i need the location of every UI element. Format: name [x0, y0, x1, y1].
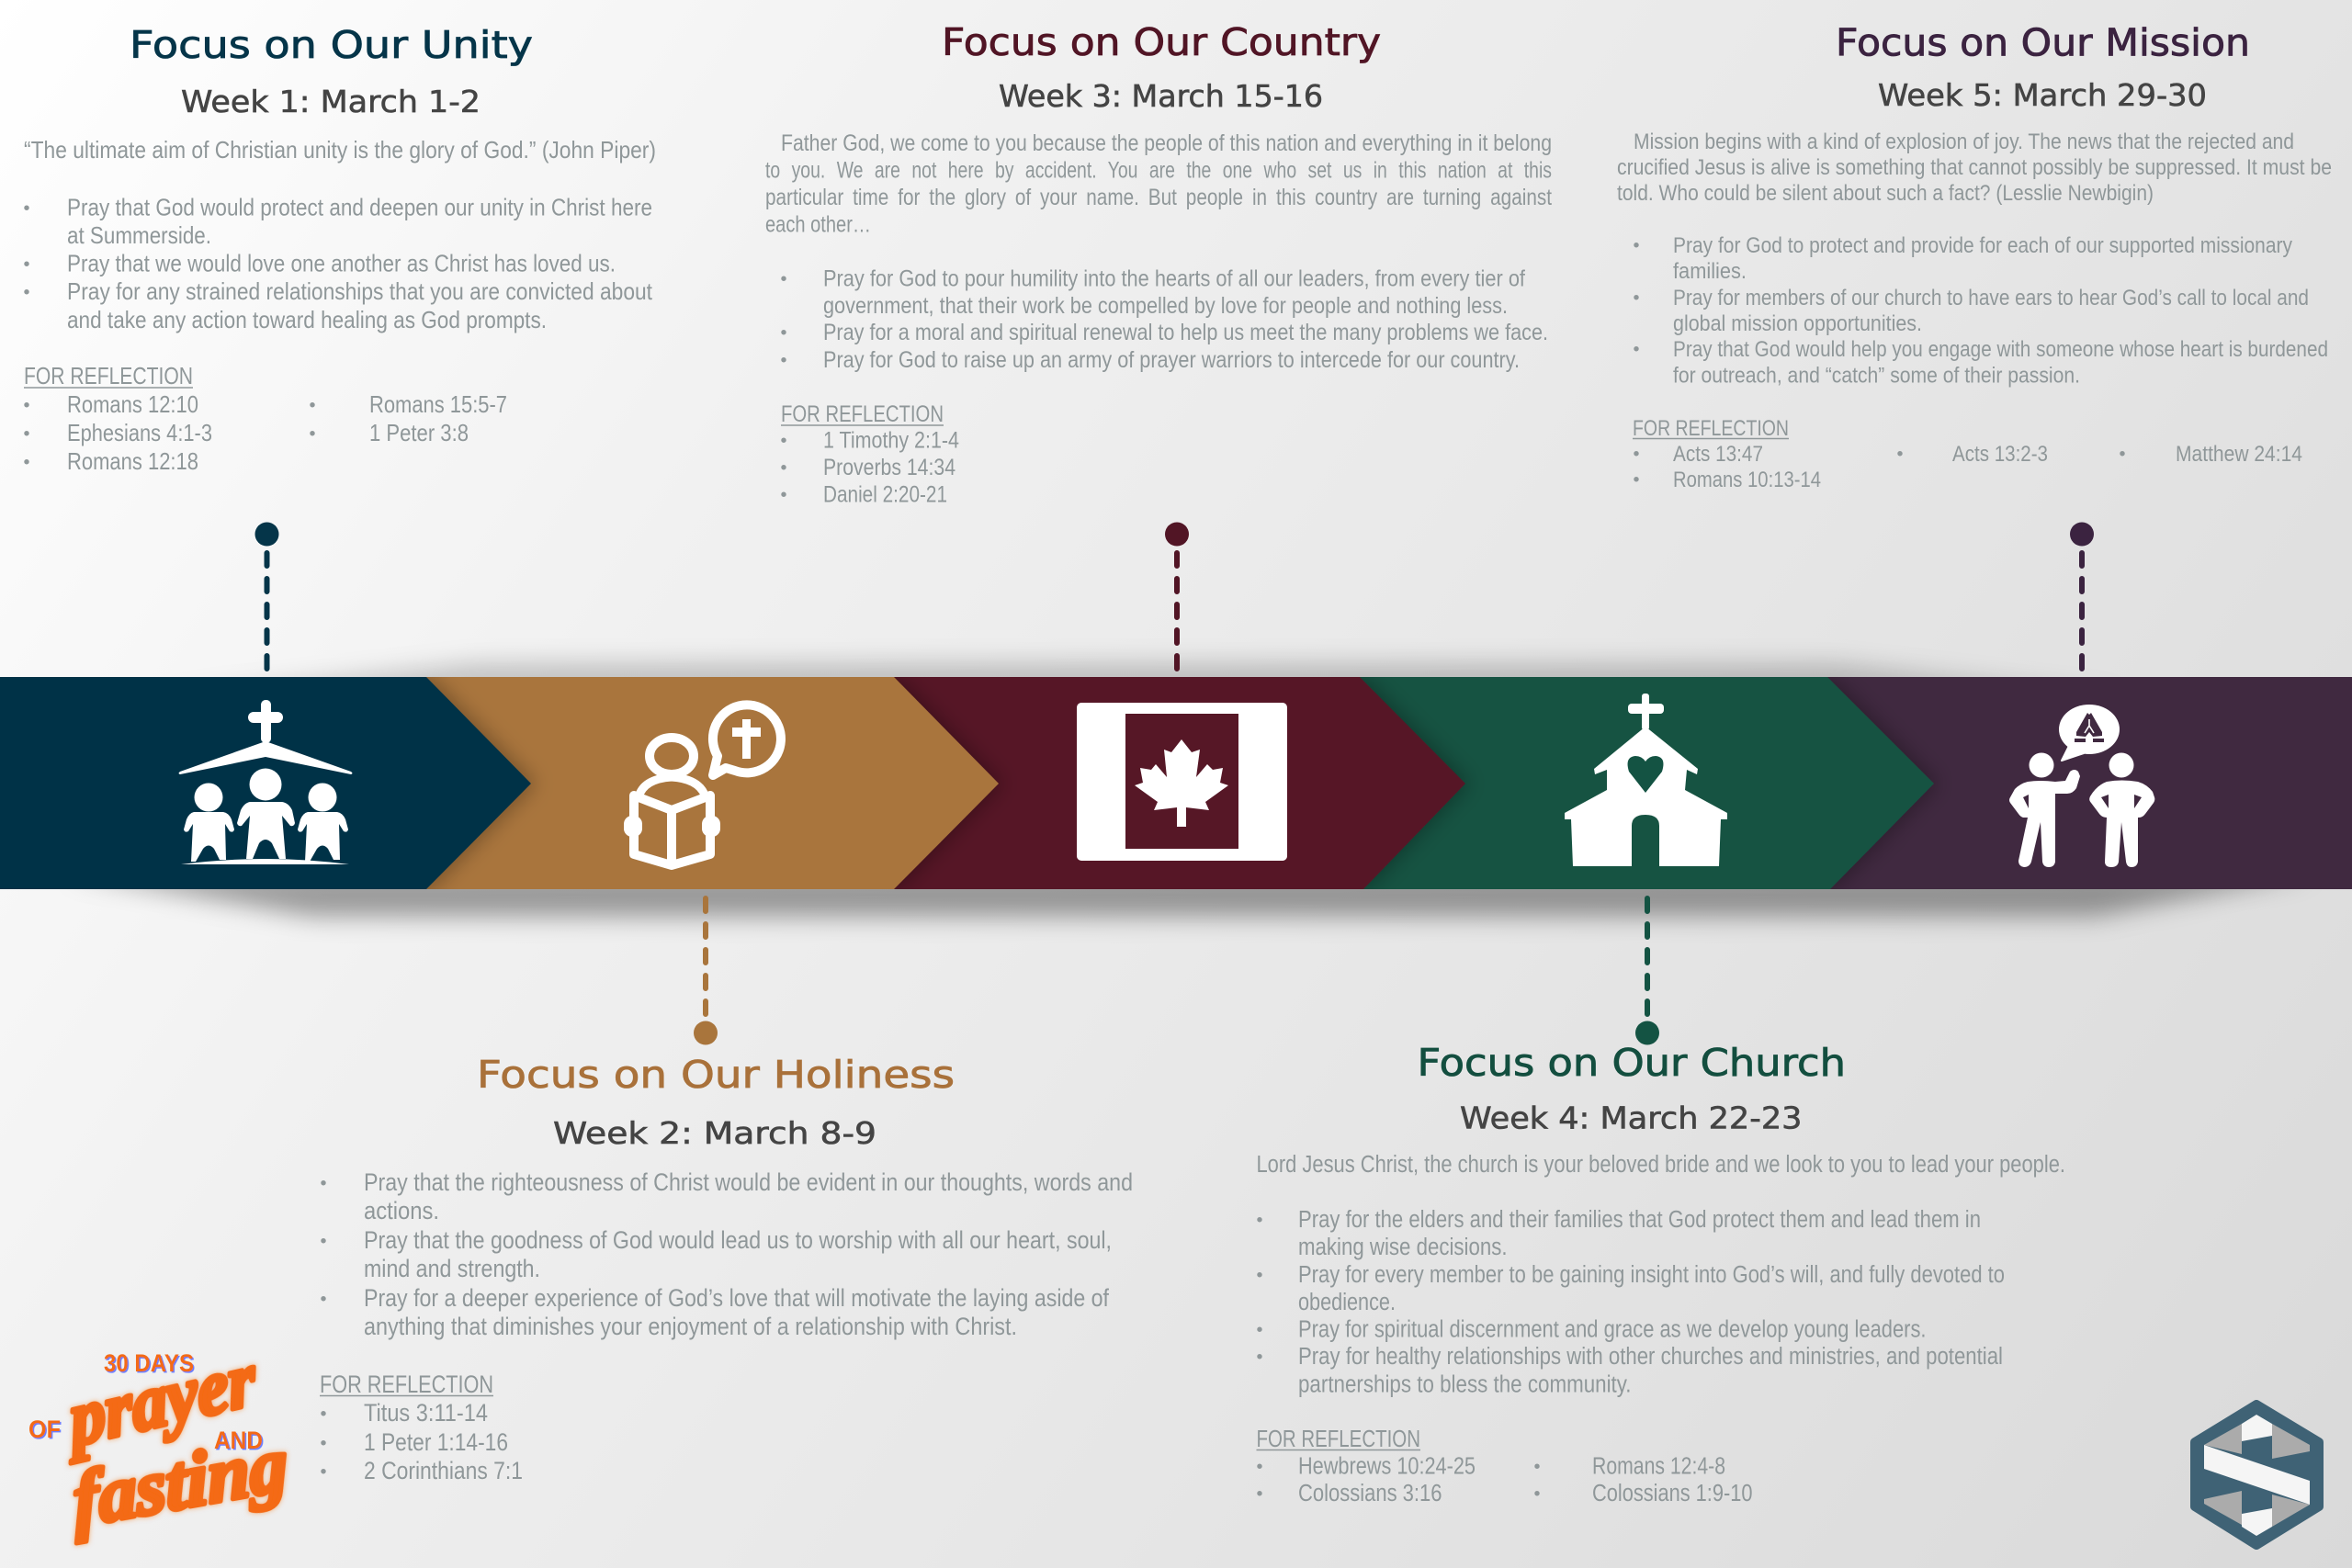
logo: 30 days of prayer and fasting	[28, 1336, 290, 1544]
text block: unity prayers: •	[23, 254, 30, 275]
reflection list: holiness: •	[320, 1404, 327, 1424]
text block: country prayer: Pray for a moral and spiritual renewal to help us meet the many problems we face.	[823, 320, 1548, 345]
panel: week 2 holiness	[320, 1053, 1133, 1484]
reflection list: unity: •	[309, 424, 316, 445]
connector: country pin	[1165, 522, 1189, 669]
title: church: Focus on Our Church	[1417, 1041, 1846, 1085]
text block: mission prayers	[1617, 130, 2332, 388]
reflection list: country: Daniel 2:20-21	[823, 481, 947, 507]
title: holiness: Focus on Our Holiness	[477, 1053, 955, 1097]
chevron: mission	[1819, 677, 2352, 889]
subheading: week 3: Week 3: March 15-16	[999, 78, 1323, 114]
text block: mission prayers: for outreach, and “catch” some of their passion.	[1673, 364, 2080, 388]
text block: country prayer: each other…	[765, 211, 871, 237]
connector: mission pin	[2070, 522, 2094, 669]
text block: country prayer: •	[780, 269, 787, 289]
chevron: holiness	[426, 677, 999, 889]
reflection list: unity: Ephesians 4:1-3	[67, 419, 212, 446]
text block: mission prayers: families.	[1673, 259, 1747, 284]
text block: country prayer: government, that their work be compelled by love for people and nothing less.	[823, 293, 1508, 319]
reflection list: mission: Matthew 24:14	[2176, 442, 2302, 467]
reflection list: church: Romans 12:4-8	[1592, 1453, 1725, 1479]
subheading: week 4: Week 4: March 22-23	[1460, 1100, 1803, 1135]
connector: holiness pin	[694, 898, 718, 1045]
reflection list: unity: Romans 15:5-7	[369, 390, 507, 418]
title: unity: Focus on Our Unity	[130, 23, 533, 67]
panel: week 1 unity	[23, 23, 656, 475]
text block: holiness prayers: •	[320, 1290, 327, 1310]
reflection list: holiness: •	[320, 1462, 327, 1483]
text block: church prayers: Pray for every member to be gaining insight into God’s will, and fully devoted to	[1298, 1262, 2005, 1288]
reflection list: country: 1 Timothy 2:1-4	[823, 428, 959, 454]
text block: holiness prayers: Pray that the goodness of God would lead us to worship with all our heart, soul,	[364, 1226, 1112, 1254]
reflection list: unity: •	[309, 395, 316, 415]
reflection list: mission	[1633, 416, 2302, 492]
subheading: week 1: Week 1: March 1-2	[181, 84, 481, 119]
text block: church prayers: partnerships to bless the community.	[1298, 1372, 1632, 1398]
chevron: country	[894, 677, 1465, 889]
text block: unity prayers: •	[23, 198, 30, 219]
text block: church prayers	[1256, 1152, 2065, 1398]
logo: summerside hexagon	[2195, 1404, 2319, 1545]
icon: two people with prayer bubble	[2009, 705, 2154, 867]
text block: country prayer: •	[780, 323, 787, 344]
icon: church roof with family	[178, 700, 353, 864]
subheading: week 2: Week 2: March 8-9	[553, 1115, 876, 1151]
text block: mission prayers: •	[1633, 288, 1640, 309]
text block: church prayers: Pray for spiritual discernment and grace as we develop young leaders.	[1298, 1317, 1926, 1343]
logo: 30 days of prayer and fasting: fasting	[71, 1421, 290, 1544]
chevron: unity	[0, 677, 531, 889]
icon: reader with bible and speech bubble	[624, 705, 781, 865]
reflection list: holiness: 1 Peter 1:14-16	[364, 1428, 508, 1456]
reflection list: church: •	[1533, 1484, 1541, 1505]
logo: 30 days of prayer and fasting: prayer	[61, 1336, 261, 1464]
reflection list: church: •	[1533, 1457, 1541, 1477]
text block: holiness prayers: Pray that the righteousness of Christ would be evident in our thoughts, words and	[364, 1168, 1133, 1196]
reflection list: holiness	[320, 1371, 523, 1484]
reflection list: unity: •	[23, 424, 30, 445]
panel: week 3 country	[765, 20, 1552, 507]
text block: holiness prayers: •	[320, 1231, 327, 1251]
text block: country prayer: Pray for God to raise up an army of prayer warriors to intercede for our country.	[823, 347, 1520, 373]
text block: country prayer	[765, 130, 1552, 373]
text block: holiness prayers: mind and strength.	[364, 1255, 540, 1282]
text block: church prayers: Pray for the elders and their families that God protect them and lead them in	[1298, 1207, 1981, 1233]
reflection list: mission: •	[1633, 470, 1640, 491]
reflection list: church	[1256, 1427, 1753, 1506]
title: mission: Focus on Our Mission	[1836, 20, 2250, 64]
reflection list: mission: •	[1633, 445, 1640, 465]
reflection list: holiness: 2 Corinthians 7:1	[364, 1457, 523, 1484]
text block: church prayers: •	[1256, 1320, 1263, 1340]
reflection list: country: •	[780, 431, 787, 451]
text block: unity prayers: •	[23, 283, 30, 303]
text block: holiness prayers: •	[320, 1174, 327, 1194]
reflection list: unity	[23, 362, 507, 475]
text block: unity prayers: at Summerside.	[67, 221, 211, 249]
text block: country prayer: particular time for the glory of your name. But people in this country are turning against	[765, 185, 1552, 210]
reflection list: unity: FOR REFLECTION	[24, 362, 193, 389]
reflection list: mission: Acts 13:2-3	[1952, 442, 2048, 467]
reflection list: unity: 1 Peter 3:8	[369, 419, 469, 446]
text block: church prayers: making wise decisions.	[1298, 1235, 1507, 1260]
reflection list: country: Proverbs 14:34	[823, 455, 956, 480]
text block: church prayers: •	[1256, 1266, 1263, 1286]
text block: church prayers: •	[1256, 1211, 1263, 1231]
reflection list: country: •	[780, 485, 787, 505]
text block: country prayer: Pray for God to pour humility into the hearts of all our leaders, from every tier of	[823, 266, 1525, 292]
reflection list: mission: FOR REFLECTION	[1633, 416, 1789, 441]
text block: church prayers: Pray for healthy relationships with other churches and ministries, and potential	[1298, 1344, 2003, 1370]
chevron: church	[1360, 677, 1934, 889]
text block: church prayers: obedience.	[1298, 1290, 1396, 1315]
reflection list: country: FOR REFLECTION	[781, 401, 944, 427]
icon: church with heart	[1565, 694, 1727, 866]
connector: church pin	[1635, 898, 1659, 1045]
subheading: week 5: Week 5: March 29-30	[1878, 77, 2207, 113]
reflection list: unity: Romans 12:10	[67, 390, 198, 418]
icon: canadian flag	[1077, 703, 1287, 861]
text block: unity prayers: “The ultimate aim of Christian unity is the glory of God.” (John Piper)	[24, 136, 656, 164]
band shadow	[64, 663, 2315, 917]
title: country: Focus on Our Country	[942, 20, 1381, 64]
connector: unity pin	[255, 522, 279, 669]
logo: 30 days of prayer and fasting: 30 DAYS	[104, 1349, 194, 1377]
logo: 30 days of prayer and fasting: AND	[214, 1427, 263, 1454]
timeline arrow band	[0, 677, 2352, 889]
text block: mission prayers: global mission opportunities.	[1673, 311, 1922, 336]
text block: country prayer: Father God, we come to you because the people of this nation and everything in it belong	[781, 130, 1552, 156]
text block: mission prayers: told. Who could be silent about such a fact? (Lesslie Newbigin)	[1617, 181, 2154, 206]
text block: holiness prayers: actions.	[364, 1197, 439, 1224]
reflection list: holiness: FOR REFLECTION	[320, 1371, 493, 1398]
text block: unity prayers	[23, 136, 656, 333]
reflection list: mission: •	[2119, 445, 2126, 465]
reflection list: church: •	[1256, 1457, 1263, 1477]
text block: country prayer: •	[780, 351, 787, 371]
logo: 30 days of prayer and fasting: OF	[28, 1416, 61, 1443]
reflection list: mission: •	[1896, 445, 1904, 465]
reflection list: church: Hewbrews 10:24-25	[1298, 1453, 1476, 1479]
panel: week 4 church	[1256, 1041, 2065, 1506]
text block: holiness prayers: Pray for a deeper experience of God’s love that will motivate the laying aside of	[364, 1284, 1110, 1312]
text block: holiness prayers: anything that diminishes your enjoyment of a relationship with Christ.	[364, 1313, 1017, 1340]
reflection list: church: Colossians 1:9-10	[1592, 1481, 1753, 1506]
reflection list: church: Colossians 3:16	[1298, 1481, 1442, 1506]
reflection list: church: •	[1256, 1484, 1263, 1505]
reflection list: holiness: Titus 3:11-14	[364, 1399, 488, 1427]
reflection list: holiness: •	[320, 1433, 327, 1453]
reflection list: country	[780, 401, 959, 507]
text block: unity prayers: Pray that we would love one another as Christ has loved us.	[67, 250, 616, 277]
panel: week 5 mission	[1617, 20, 2332, 492]
reflection list: mission: Acts 13:47	[1673, 442, 1763, 467]
text block: unity prayers: Pray that God would protect and deepen our unity in Christ here	[67, 193, 652, 220]
reflection list: unity: •	[23, 395, 30, 415]
text block: unity prayers: and take any action toward healing as God prompts.	[67, 306, 547, 333]
text block: holiness prayers	[320, 1168, 1133, 1340]
text block: mission prayers: •	[1633, 235, 1640, 255]
reflection list: mission: Romans 10:13-14	[1673, 468, 1821, 492]
reflection list: unity: •	[23, 452, 30, 472]
text block: country prayer: to you. We are not here by accident. You are the one who set us in this nation at this	[765, 158, 1552, 184]
reflection list: church: FOR REFLECTION	[1257, 1427, 1420, 1452]
reflection list: unity: Romans 12:18	[67, 447, 198, 475]
text block: church prayers: Lord Jesus Christ, the church is your beloved bride and we look to you to lead your people.	[1257, 1152, 2065, 1178]
reflection list: country: •	[780, 457, 787, 478]
text block: unity prayers: Pray for any strained relationships that you are convicted about	[67, 277, 653, 305]
text block: church prayers: •	[1256, 1347, 1263, 1367]
text block: mission prayers: •	[1633, 340, 1640, 360]
